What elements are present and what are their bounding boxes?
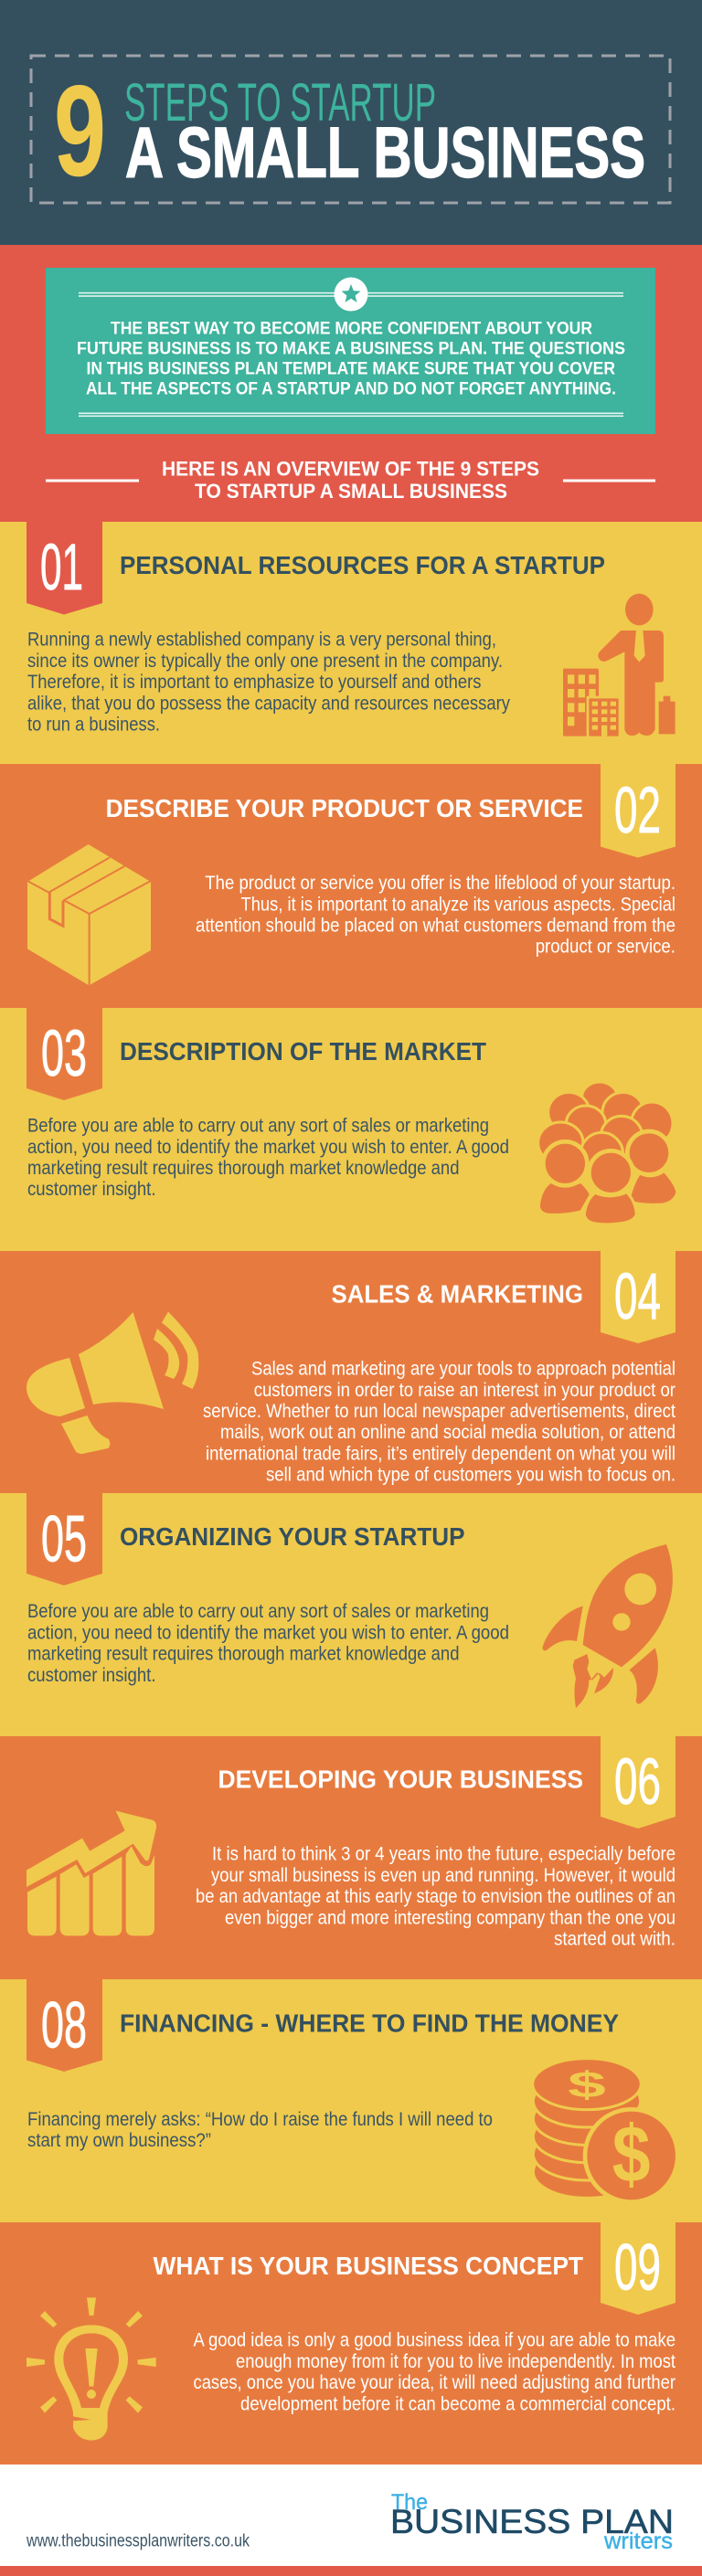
logo: the business plan writers: [390, 2490, 674, 2554]
icon: rocket: [542, 1544, 673, 1708]
badge 08: [27, 1979, 102, 2072]
panel: step 03 description of the market: [0, 1008, 702, 1251]
title: steps to startup: STEPS TO STARTUP: [124, 73, 436, 133]
panel: step 05 organizing your startup: [0, 1493, 702, 1736]
body text 02: product or service.: [536, 937, 675, 958]
body text 03: action, you need to identify the market you wish to enter. A good: [27, 1137, 509, 1158]
title: number 9: 9: [54, 58, 106, 204]
body text 02: [196, 873, 675, 958]
body text 01: since its owner is typically the only one present in the company.: [27, 651, 503, 672]
heading 02: DESCRIBE YOUR PRODUCT OR SERVICE: [106, 794, 583, 822]
body text 01: to run a business.: [27, 715, 160, 736]
footer: [0, 2465, 702, 2576]
badge 06: [601, 1736, 675, 1829]
body text 08: start my own business?”: [27, 2130, 211, 2151]
callout box: [46, 268, 655, 434]
badge 05: [27, 1493, 102, 1585]
panel: step 02 product or service: [0, 764, 702, 1008]
body text 03: marketing result requires thorough market knowledge and: [27, 1158, 459, 1179]
header panel: [0, 0, 702, 245]
callout text: [77, 318, 625, 398]
icon: cardboard box: [27, 844, 151, 985]
body text 09: [194, 2329, 675, 2414]
callout text: THE BEST WAY TO BECOME MORE CONFIDENT ABOUT YOUR: [111, 318, 592, 338]
intro panel: [0, 245, 702, 522]
panel: step 09 business concept: [0, 2222, 702, 2465]
body text 01: alike, that you do possess the capacity and resources necessary: [27, 694, 510, 715]
badge 03: [27, 1008, 102, 1100]
body text 08: Financing merely asks: “How do I raise the funds I will need to: [27, 2109, 493, 2130]
heading 01: PERSONAL RESOURCES FOR A STARTUP: [120, 551, 605, 579]
logo: the business plan writers: The: [391, 2490, 428, 2515]
body text 05: Before you are able to carry out any sort of sales or marketing: [27, 1601, 489, 1622]
panel: step 04 sales and marketing: [0, 1251, 702, 1493]
panel: step 06 developing your business: [0, 1736, 702, 1979]
body text 08: [27, 2109, 493, 2151]
body text 04: [203, 1359, 675, 1486]
icon: light bulb: [27, 2297, 156, 2441]
icon: businessman and buildings: [563, 594, 675, 738]
body text 06: [196, 1844, 675, 1950]
body text 06: started out with.: [554, 1929, 675, 1950]
badge 03: 03: [41, 1018, 87, 1090]
icon: megaphone: [27, 1312, 198, 1454]
body text 05: action, you need to identify the market you wish to enter. A good: [27, 1623, 509, 1644]
panel: step 08 financing: [0, 1979, 702, 2222]
body text 03: Before you are able to carry out any sort of sales or marketing: [27, 1115, 489, 1136]
logo: the business plan writers: writers: [603, 2528, 673, 2554]
overview heading: TO STARTUP A SMALL BUSINESS: [195, 480, 507, 503]
body text 05: [27, 1601, 509, 1686]
callout text: ALL THE ASPECTS OF A STARTUP AND DO NOT FORGET ANYTHING.: [86, 378, 616, 398]
callout text: FUTURE BUSINESS IS TO MAKE A BUSINESS PLAN. THE QUESTIONS: [77, 338, 625, 358]
badge 09: [601, 2222, 675, 2315]
badge 09: 09: [614, 2231, 661, 2305]
badge 02: [601, 764, 675, 857]
icon: star badge: [335, 278, 367, 311]
badge 04: [601, 1251, 675, 1343]
body text 05: marketing result requires thorough market knowledge and: [27, 1644, 459, 1665]
icon: stack of coins: [533, 2059, 677, 2202]
badge 05: 05: [41, 1504, 87, 1575]
badge 06: 06: [614, 1746, 661, 1818]
badge 02: 02: [614, 775, 661, 847]
icon: crowd of people: [538, 1082, 677, 1224]
badge 08: 08: [41, 1990, 87, 2062]
body text 01: Running a newly established company is a very personal thing,: [27, 630, 496, 651]
overview heading: [46, 457, 655, 503]
heading 06: DEVELOPING YOUR BUSINESS: [218, 1765, 583, 1793]
panel: step 01 personal resources: [0, 522, 702, 764]
body text 03: customer insight.: [27, 1179, 155, 1200]
body text 03: [27, 1115, 509, 1200]
website url: www.thebusinessplanwriters.co.uk: [26, 2532, 250, 2551]
badge 01: [27, 522, 102, 614]
badge 04: 04: [614, 1261, 661, 1333]
heading 04: SALES & MARKETING: [331, 1279, 583, 1309]
overview heading: HERE IS AN OVERVIEW OF THE 9 STEPS: [162, 457, 539, 481]
body text 05: customer insight.: [27, 1665, 155, 1686]
body text 01: Therefore, it is important to emphasize to yourself and others: [27, 672, 481, 693]
callout text: IN THIS BUSINESS PLAN TEMPLATE MAKE SURE THAT YOU COVER: [86, 358, 615, 378]
body text 01: [27, 630, 510, 736]
logo: the business plan writers: BUSINESS PLAN: [390, 2503, 674, 2540]
icon: stack of coins: $: [568, 2064, 606, 2105]
badge 01: 01: [40, 532, 83, 604]
heading 08: FINANCING - WHERE TO FIND THE MONEY: [120, 2009, 619, 2037]
heading 03: DESCRIPTION OF THE MARKET: [120, 1037, 486, 1065]
heading 09: WHAT IS YOUR BUSINESS CONCEPT: [154, 2252, 583, 2280]
icon: growth bar chart with arrow: [27, 1811, 156, 1935]
heading 05: ORGANIZING YOUR STARTUP: [120, 1522, 464, 1551]
icon: stack of coins: $: [612, 2110, 651, 2200]
